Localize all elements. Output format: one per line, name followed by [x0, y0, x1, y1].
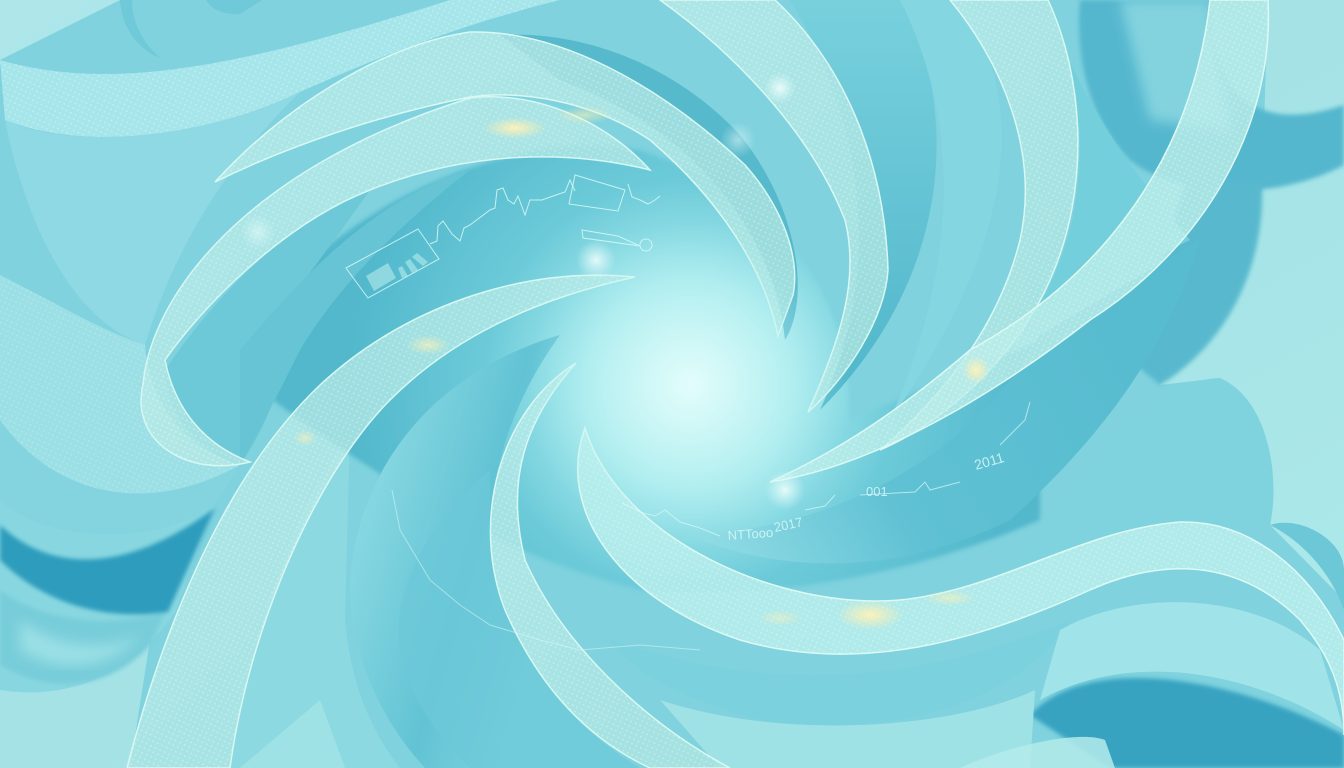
centre glow: [530, 225, 850, 545]
chart: upper line chart: [430, 180, 660, 244]
chart: dashboard card: [569, 175, 652, 251]
ribbon: lower centre curl: [490, 363, 730, 768]
ribbon: lower-left sweep to centre: [127, 275, 635, 768]
ribbon: lower right wide sweep: [578, 428, 1344, 735]
panel: central vortex glow: [220, 146, 1040, 592]
ribbon: inner loop from left: [141, 97, 650, 466]
ribbon: bottom edge fold: [960, 737, 1115, 768]
chart: bar chart frame: [346, 229, 439, 298]
lower-centre blades: [350, 335, 640, 768]
ribbon: top centre falling blade: [660, 0, 888, 412]
highlights: golden sparkles: [293, 106, 990, 630]
ribbon: far right sweep to centre: [770, 0, 1268, 482]
highlights: white glints: [240, 72, 805, 510]
ribbon: upper long sweep: [215, 32, 795, 336]
chart: lower numeric line: 2011: [972, 449, 1006, 473]
chart: lower numeric line: [622, 402, 1030, 543]
ribbon: top right falling blade: [880, 0, 1078, 450]
chart: bottom line trace: [392, 490, 700, 650]
chart: lower numeric line: NTTooo: [727, 525, 774, 543]
chart: lower numeric line: 2017: [773, 514, 804, 535]
chart: lower numeric line: 001: [866, 484, 888, 499]
dark fan blades between ribbons: [165, 0, 1200, 563]
